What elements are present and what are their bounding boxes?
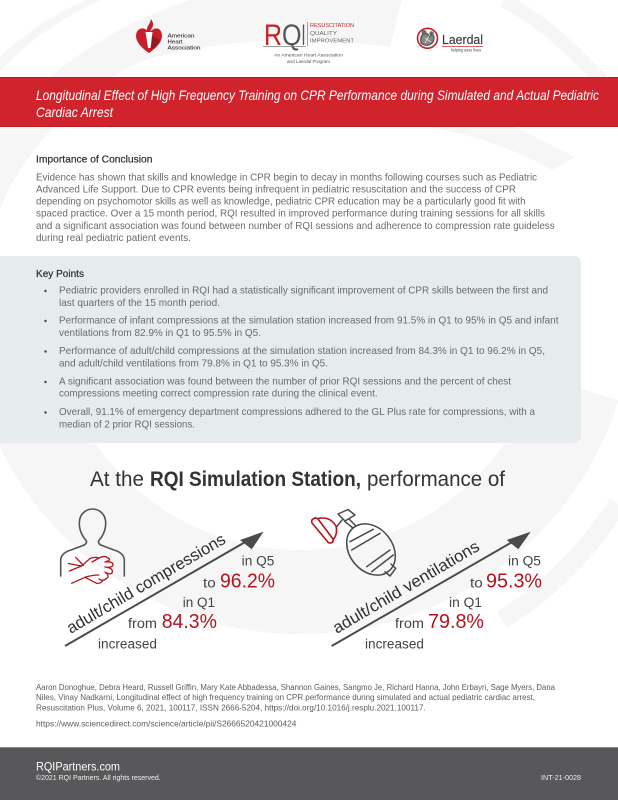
bullet 5: Overall, 91.1% of emergency department compressions adhered to the GL Plus rate for compressions, with a xyxy=(59,407,535,418)
text block: importance of conclusion: during real pediatric patient events. xyxy=(36,233,191,244)
text block: importance of conclusion: Advanced Life Support. Due to CPR events being infrequent in pediatric resuscitation and the success of CPR xyxy=(36,184,516,196)
icon: heart and torch xyxy=(136,19,162,53)
bullet 1: Pediatric providers enrolled in RQI had a statistically significant improvement of CPR skills between the first and xyxy=(59,286,548,296)
logo: RQI: R xyxy=(264,19,282,52)
bullet 1 xyxy=(44,286,548,309)
logo: RQI: I xyxy=(302,19,306,52)
bullet 3: Performance of adult/child compressions at the simulation station increased from 84.3% in Q1 to 96.2% in Q5, xyxy=(59,346,545,357)
heading: RQI simulation station xyxy=(90,468,505,491)
citation xyxy=(36,682,555,729)
logo: Laerdal xyxy=(418,28,483,53)
logo: Laerdal: Laerdal xyxy=(442,33,483,47)
arrow: increase xyxy=(332,532,531,646)
stat: adult/child ventilations: 79.8% xyxy=(428,610,484,633)
stat: adult/child ventilations: from xyxy=(395,616,424,631)
title banner: Cardiac Arrest xyxy=(36,104,114,120)
stat: adult/child ventilations: in Q1 xyxy=(449,595,482,610)
heading: importance of conclusion: Importance of Conclusion xyxy=(36,154,152,166)
bullet 3: and adult/child ventilations from 79.8% in Q1 to 95.3% in Q5. xyxy=(59,359,328,370)
logo: American Heart Association: Association xyxy=(168,46,200,52)
stat: adult/child compressions: in Q1 xyxy=(183,595,215,610)
stat: adult/child ventilations: increased xyxy=(365,637,424,652)
logo: RQI: RESUSCITATION xyxy=(310,23,354,29)
stat: adult/child ventilations xyxy=(312,510,542,652)
stat: adult/child ventilations: to xyxy=(470,576,483,591)
stat: adult/child compressions: increased xyxy=(98,637,157,652)
citation: Niles, Vinay Nadkarni, Longitudinal effect of high frequency training on CPR performance during simulated and actual pediatric cardiac arrest, xyxy=(36,692,535,702)
heading: RQI simulation station: At the xyxy=(90,468,144,491)
stat: adult/child compressions: 84.3% xyxy=(162,610,217,633)
footer: ©2021 RQI Partners. All rights reserved. xyxy=(36,773,161,782)
text block: importance of conclusion: depending on psychomotor skills as well as knowledge, pediatric CPR education may be a particularly good fit with xyxy=(36,196,526,208)
logo: RQI: Q xyxy=(282,19,302,52)
logo: RQI: QUALITY xyxy=(310,31,337,37)
arrow: increase xyxy=(65,532,264,646)
citation: Resuscitation Plus, Volume 6, 2021, 100117, ISSN 2666-5204, https://doi.org/10.1016/j.resplu.2021.100117. xyxy=(36,702,426,712)
bullet 4: compressions meeting correct compression rate during the clinical event. xyxy=(59,389,378,400)
bullet 5: median of 2 prior RQI sessions. xyxy=(59,419,195,430)
icon: Laerdal emblem xyxy=(418,28,438,48)
stat: adult/child ventilations: adult/child ventilations xyxy=(330,537,483,637)
logo: RQI xyxy=(263,19,354,65)
footer: INT-21-0028 xyxy=(541,773,581,782)
heading: RQI simulation station: performance of xyxy=(367,468,505,491)
logo: Laerdal: helping save lives xyxy=(451,48,482,53)
logo: American Heart Association xyxy=(136,19,200,53)
citation: Aaron Donoghue, Debra Heard, Russell Griffin, Mary Kate Abbadessa, Shannon Gaines, Sangmo Je, Richard Hanna, John Erbayri, Sage Myers, Dana xyxy=(36,682,555,692)
bullet 2: ventilations from 82.9% in Q1 to 95.5% in Q5. xyxy=(59,328,261,339)
logo: American Heart Association: Heart xyxy=(168,40,183,46)
bullet 2 xyxy=(44,316,559,339)
bullet 4: A significant association was found between the number of prior RQI sessions and the percent of chest xyxy=(59,376,511,387)
stat: adult/child compressions: from xyxy=(128,616,157,631)
bullet 4 xyxy=(44,376,511,400)
panel: key points xyxy=(0,256,581,443)
stat: adult/child compressions: adult/child compressions xyxy=(64,530,229,637)
title banner xyxy=(0,77,618,127)
stat: adult/child ventilations: 95.3% xyxy=(486,570,542,593)
logo: RQI: and Laerdal Program xyxy=(287,59,330,65)
footer xyxy=(0,747,618,800)
stat: adult/child compressions: to xyxy=(203,576,216,591)
heading: key points: Key Points xyxy=(36,269,84,280)
logo: RQI: An American Heart Association xyxy=(274,52,343,58)
bullet 5 xyxy=(44,407,535,430)
bullet 3 xyxy=(44,346,545,370)
footer: RQIPartners.com xyxy=(36,760,120,774)
stat: adult/child compressions: in Q5 xyxy=(242,554,274,569)
stat: adult/child compressions xyxy=(61,509,275,652)
icon: person receiving compressions xyxy=(61,509,124,583)
icon: bag valve mask xyxy=(312,510,405,585)
citation: https://www.sciencedirect.com/science/article/pii/S2666520421000424 xyxy=(36,719,297,729)
logo: RQI: IMPROVEMENT xyxy=(310,38,354,44)
text block: importance of conclusion: spaced practice. Over a 15 month period, RQI resulted in improved performance during training sessions for all skills xyxy=(36,209,545,220)
heading: RQI simulation station: RQI Simulation Station, xyxy=(150,468,361,491)
text block: importance of conclusion: and a significant association was found between number of RQI sessions and adherence to compression rate guideless xyxy=(36,221,555,232)
stat: adult/child ventilations: in Q5 xyxy=(508,554,541,569)
background: concentric swoosh rings xyxy=(0,0,618,620)
bullet 1: last quarters of the 15 month period. xyxy=(59,298,220,309)
text block: importance of conclusion: Evidence has shown that skills and knowledge in CPR begin to decay in months following courses such as Pediatric xyxy=(36,173,537,184)
logo: American Heart Association: American xyxy=(168,34,194,40)
stat: adult/child compressions: 96.2% xyxy=(220,570,275,593)
text block: importance of conclusion xyxy=(36,154,555,244)
bullet 2: Performance of infant compressions at the simulation station increased from 91.5% in Q1 to 95% in Q5 and infant xyxy=(59,316,559,327)
